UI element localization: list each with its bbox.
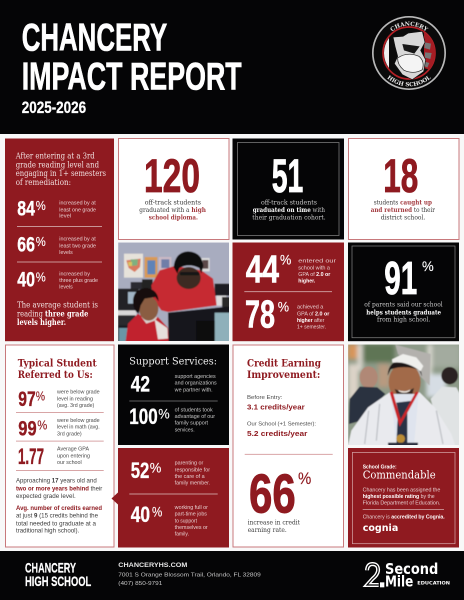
caption (364, 301, 443, 323)
caption: students caught up (374, 199, 432, 207)
stat: 1.77 GPA: Average GPA (57, 447, 90, 453)
blurred background (348, 344, 460, 401)
stat: 84%: least one grade (59, 207, 96, 213)
stat: 66%: 66 (249, 462, 296, 524)
stat: 52%: the care of a (175, 474, 205, 480)
footer band (0, 551, 464, 600)
title: CHANCERY (22, 17, 167, 60)
bystander: man in white shirt (431, 367, 460, 446)
intro text: of remediation: (16, 178, 71, 187)
before entry rate (247, 395, 305, 411)
stat: 78%: 78 (245, 293, 275, 336)
stat: 100%: advantage of our (175, 414, 215, 420)
text block: age: expected grade level. (16, 493, 76, 500)
stat: 97%: 97 (18, 388, 36, 411)
stat: 44%: entered our (298, 259, 336, 265)
stat: 99%: 3rd grade) (57, 431, 82, 437)
contact details (118, 563, 261, 587)
subtitle: year: 2025-2026 (22, 99, 86, 117)
stat: 66%: least two grade (59, 243, 96, 249)
caption: school diploma. (149, 214, 198, 222)
stat: 1.77 GPA: 1.77 (18, 444, 44, 469)
heading: Referred to Us: (18, 369, 93, 381)
stat: 99%: level in math (avg. (57, 425, 100, 431)
panel: 18 students: 18 (383, 149, 418, 202)
before entry rate: Before Entry: (247, 395, 282, 401)
stat: 99%: 99 (18, 417, 37, 440)
text block: age: two or more years behind their (16, 485, 102, 492)
accreditation: Chancery is accredited by Cognia. (363, 514, 445, 520)
stat: 52%: parenting or (175, 461, 204, 467)
intro text: After entering at a 3rd (15, 152, 95, 160)
title (22, 17, 242, 98)
panel: 91% of parents: 91 (384, 252, 417, 304)
bystander: bald man (349, 366, 385, 424)
before entry rate: 3.1 credits/year (247, 402, 305, 411)
stat: 1.77 GPA (18, 444, 90, 469)
stat: 40%: three plus grade (59, 278, 98, 284)
stat: 99% (18, 417, 100, 440)
stat: 66%: increase in credit (248, 518, 300, 526)
stat: 66%: % (36, 234, 46, 249)
text block: credits: traditional high school). (16, 528, 80, 535)
our school rate (247, 422, 316, 438)
school name (25, 560, 92, 589)
stat: 42: and organizations (175, 381, 217, 387)
stat: 40%: family. (175, 531, 189, 537)
stat: 40% (17, 269, 98, 292)
stat: 84% (17, 197, 96, 220)
stat: 84%: increased by at (59, 201, 96, 207)
stat: 44%: higher. (298, 279, 316, 285)
stat: 99%: were below grade (57, 418, 100, 424)
text block: credits: total needed to graduate at a (16, 520, 97, 527)
contact details: 7001 S Orange Blossom Trail, Orlando, FL 32809 (118, 572, 261, 578)
heading (247, 357, 321, 381)
stat: 42: we partner with. (175, 387, 213, 393)
caption: from high school. (377, 315, 430, 323)
closing text: levels higher. (17, 318, 66, 327)
title: IMPACT REPORT (22, 55, 242, 98)
stat: 44%: GPA of 2.0 or (298, 272, 330, 278)
stat: 97% (18, 388, 100, 411)
stat: 40%: levels (59, 284, 73, 290)
panel: credit earning improvement (233, 345, 344, 547)
photo: graduate in white cap and gown (348, 344, 460, 446)
icon: second mile logo (367, 560, 450, 590)
stat: 1.77 GPA: our school (57, 460, 82, 466)
stat: 40%: % (152, 505, 162, 520)
stat: 97%: % (36, 389, 45, 404)
closing text (17, 300, 98, 327)
arrow pointing to typical student (112, 492, 118, 505)
graduate gown (348, 392, 455, 446)
panel: 51 students: 51 (272, 149, 303, 202)
hair and cap (388, 354, 423, 377)
stat: 40% (131, 502, 208, 537)
stat: 42: 42 (131, 371, 150, 396)
panel: GPA stats (232, 242, 344, 341)
heading (18, 357, 97, 381)
stat: 97%: were below grade (57, 390, 100, 396)
stat: 44%: school with a (298, 265, 330, 271)
school name: HIGH SCHOOL (25, 573, 92, 589)
stat: 52% (131, 458, 210, 486)
stat: 100%: family support (175, 421, 209, 427)
text block: credits (16, 505, 102, 535)
stat: 84%: 84 (17, 197, 35, 220)
stat: 78%: 1+ semester. (297, 325, 326, 331)
stat: 40%: themselves or (175, 525, 208, 531)
stat: 100%: of students took (175, 407, 213, 413)
closing text: The average student is (17, 300, 98, 309)
icon: school bulldog logo: HIGH SCHOOL (387, 75, 431, 86)
poster: US map (124, 254, 143, 278)
caption: graduated on time with (253, 206, 325, 214)
stat: 40%: working full or (175, 505, 208, 511)
stat: 66%: levels (59, 250, 73, 256)
stat: 66%: 66 (17, 233, 35, 256)
stat: 100%: services. (175, 427, 195, 433)
text block: credits: at just 9 (15 credits behind the (16, 513, 99, 520)
heading: Credit Earning (247, 357, 321, 369)
photo: staff helping student at computer (118, 242, 230, 344)
caption: off-track students (261, 199, 317, 207)
stat: 66%: earning rate. (248, 526, 287, 534)
stat: 78%: higher after (297, 318, 325, 324)
stat: 42: support agencies (175, 374, 216, 380)
heading: Typical Student (18, 357, 97, 369)
stat: 52%: 52 (131, 458, 149, 483)
panel: family and work (112, 448, 229, 548)
heading: Support Services: (129, 355, 217, 367)
text block: credits: Avg. number of credits earned (16, 505, 102, 512)
stat: 99%: % (37, 418, 48, 433)
stat: 66% (17, 233, 96, 256)
caption (252, 199, 326, 222)
contact details: (407) 850-9791 (118, 581, 162, 587)
panel: school grade commendable (348, 448, 459, 548)
foreground monitor (168, 306, 230, 344)
stat: 40%: % (36, 269, 46, 284)
description: Florida Department of Education. (363, 501, 440, 507)
stat: 78%: % (278, 299, 289, 315)
header band (0, 0, 464, 134)
stat: 44% (246, 249, 336, 292)
description: highest possible rating by the (363, 494, 435, 500)
stat: 40%: 40 (17, 269, 35, 292)
man in red polo (151, 251, 217, 312)
icon: second mile logo: EDUCATION (417, 581, 450, 587)
stat: 66%: % (298, 469, 311, 488)
text block: age (16, 478, 102, 500)
intro text (15, 152, 106, 187)
closing text: reading three grade (17, 310, 88, 319)
text block: age: Approaching 17 years old and (16, 478, 97, 485)
panel: 18 students (348, 138, 459, 240)
stat: 97%: (avg. 3rd grade) (57, 403, 95, 409)
intro text: engaging in 1+ semesters (16, 169, 106, 178)
stat: 78%: achieved a (297, 305, 323, 311)
intro text: grade reading level and (16, 160, 99, 169)
heading: Improvement: (247, 369, 320, 381)
description (363, 487, 440, 507)
stat: 84%: level (59, 214, 71, 220)
caption: graduated with a high (139, 206, 206, 214)
caption: and returned to their (371, 206, 436, 214)
panel: typical student (6, 345, 114, 547)
stat: 40%: to support (175, 518, 198, 524)
our school rate: Our School (+1 Semester): (247, 422, 316, 428)
panel: 91% of parents: % (422, 258, 434, 274)
label: School Grade: (363, 464, 397, 470)
stat: 52%: % (150, 461, 161, 476)
grade: Commendable (363, 468, 436, 482)
stat: 40%: increased by (59, 271, 90, 277)
stat: 84%: % (36, 198, 46, 213)
stat: 52%: family member. (175, 480, 210, 486)
stat: 100%: % (158, 407, 170, 422)
caption (371, 199, 436, 222)
icon: second mile logo: Second (385, 560, 438, 578)
panel: 91% of parents (348, 242, 459, 341)
stat: 1.77 GPA: upon entering (57, 453, 90, 459)
caption (139, 199, 206, 222)
stat: 44%: 44 (246, 249, 279, 292)
face (388, 366, 421, 395)
panel: 120 students: 120 (144, 149, 200, 202)
stat: 97%: level in reading (57, 396, 93, 402)
stat: 100%: 100 (129, 404, 158, 429)
stat: 40%: part-time jobs (175, 512, 207, 518)
caption: of parents said our school (364, 301, 443, 309)
stat: 40%: 40 (131, 502, 150, 527)
panel: remediation results (5, 138, 114, 341)
student in red hoodie (125, 288, 169, 344)
description: Chancery has been assigned the (363, 487, 440, 493)
caption: their graduation cohort. (252, 214, 326, 222)
panel: 51 students (232, 138, 344, 240)
contact details: CHANCERYHS.COM (118, 563, 187, 569)
school name: CHANCERY (25, 560, 76, 576)
panel: 120 students (118, 138, 229, 240)
caption: helps students graduate (366, 308, 441, 316)
shirt, tie and lanyard (388, 391, 419, 446)
panel: support services (118, 344, 229, 445)
stat: 44%: % (280, 251, 291, 267)
icon: second mile logo: Mile (385, 572, 413, 590)
mortarboard cap (395, 345, 431, 386)
stat: 100% (129, 404, 215, 433)
caption: district school. (381, 214, 425, 222)
icon: school bulldog logo: CHANCERY (390, 22, 428, 31)
caption: off-track students (145, 199, 201, 207)
stat: 78%: GPA of 2.0 or (297, 311, 329, 317)
stat: 52%: responsible for (175, 467, 210, 473)
stat: 78% (245, 293, 329, 336)
cognia logo: cognia (363, 523, 398, 534)
stat: 42 (131, 371, 217, 396)
stat: 66%: increased by at (59, 237, 96, 243)
icon: school bulldog logo (372, 16, 446, 90)
our school rate: 5.2 credits/year (247, 429, 307, 438)
